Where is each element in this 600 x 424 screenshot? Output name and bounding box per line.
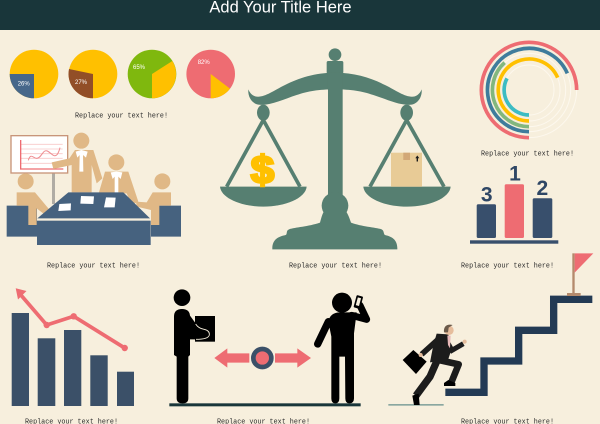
sofas bbox=[7, 206, 181, 237]
caption: meeting: Replace your text here! bbox=[47, 262, 140, 270]
icon: parcel box bbox=[391, 153, 422, 187]
pie chart 27%: 27% bbox=[75, 80, 88, 86]
standing presenter bbox=[52, 133, 102, 192]
panel: meeting illustration bbox=[7, 133, 181, 270]
ring: green bbox=[492, 63, 529, 127]
pie chart 26%: 26% bbox=[18, 82, 30, 88]
scale frame bbox=[248, 48, 422, 249]
table bbox=[37, 192, 151, 245]
caption: podium: Replace your text here! bbox=[461, 262, 554, 270]
seated person left bbox=[17, 173, 52, 225]
pie chart 65% bbox=[128, 50, 176, 98]
bar: first place: 1 bbox=[509, 163, 521, 186]
bars bbox=[12, 313, 134, 406]
bar: second place: 2 bbox=[536, 177, 548, 200]
right pan bbox=[363, 105, 451, 207]
ground line bbox=[169, 403, 361, 406]
left pan bbox=[220, 105, 307, 207]
ring: blue bbox=[487, 48, 567, 132]
bar: third place: 3 bbox=[481, 184, 493, 207]
person holding box bbox=[174, 289, 215, 403]
second person bbox=[99, 154, 138, 205]
panel: people exchange bbox=[169, 289, 367, 424]
header bbox=[0, 0, 600, 30]
panel: bar chart with trend arrow bbox=[12, 288, 134, 424]
panel: concentric ring chart bbox=[481, 42, 577, 159]
pie chart 26% bbox=[10, 50, 58, 98]
stairs bbox=[445, 299, 592, 392]
pie chart 82% bbox=[186, 50, 235, 98]
seated person right bbox=[136, 173, 171, 225]
caption: pies: Replace your text here! bbox=[75, 112, 168, 120]
panel: balance scale bbox=[220, 48, 451, 270]
ground bbox=[388, 404, 444, 406]
flag bbox=[567, 253, 593, 296]
ring: pink bbox=[481, 42, 577, 138]
person on phone bbox=[318, 293, 367, 403]
trend line arrow bbox=[16, 288, 128, 351]
panel: stairs to goal bbox=[388, 253, 593, 424]
ring: yellow bbox=[498, 59, 558, 121]
running businessman bbox=[403, 325, 467, 405]
presentation board bbox=[11, 136, 68, 173]
pie chart 65%: 65% bbox=[133, 65, 146, 71]
panel: podium chart bbox=[461, 163, 558, 270]
caption: scale: Replace your text here! bbox=[289, 262, 382, 270]
ring: teal bbox=[504, 78, 529, 115]
caption: rings: Replace your text here! bbox=[481, 150, 574, 158]
double arrow with circle bbox=[214, 348, 311, 368]
icon: dollar sign: $ bbox=[251, 147, 274, 192]
pie chart 27% bbox=[68, 50, 117, 98]
pie chart 82%: 82% bbox=[198, 60, 210, 66]
panel: pie charts bbox=[10, 50, 235, 121]
